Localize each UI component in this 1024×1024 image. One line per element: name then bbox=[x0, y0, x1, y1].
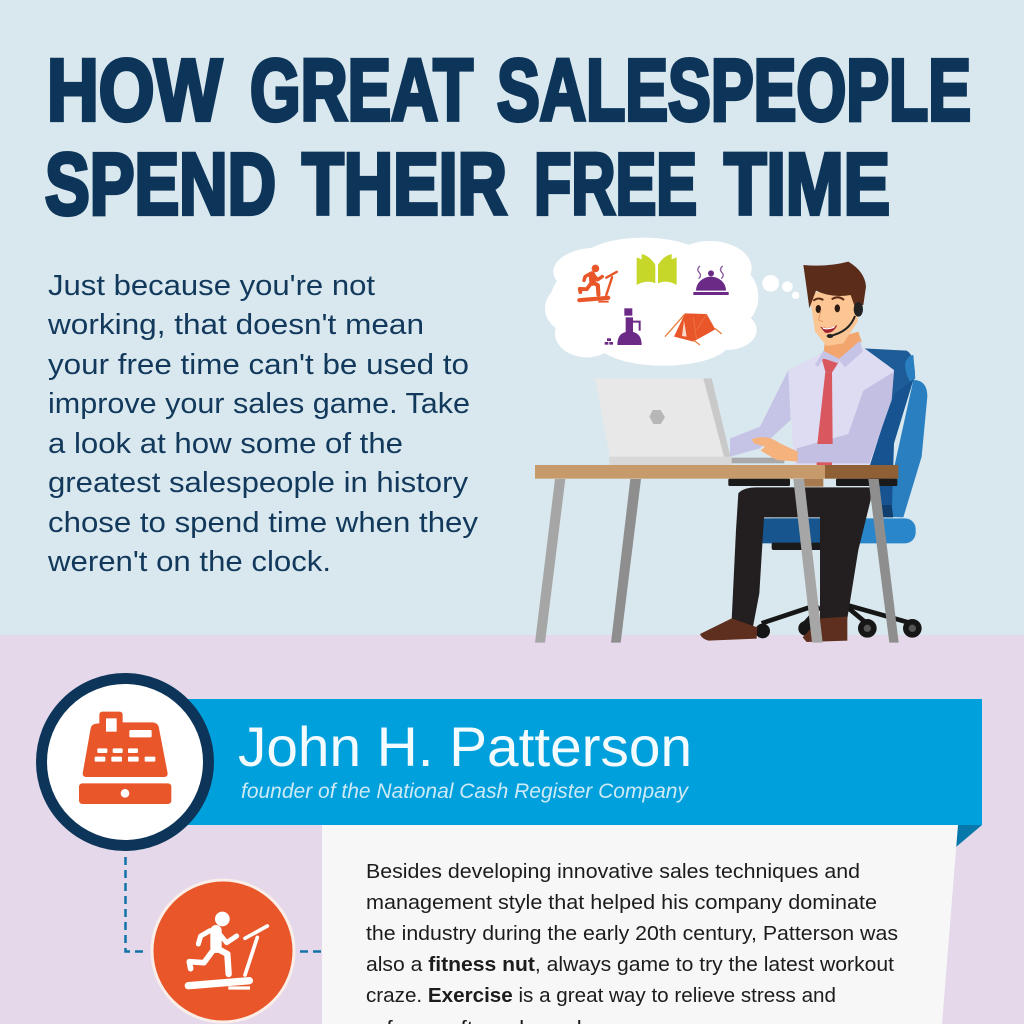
panel: biography text: the industry during the early 20th century, Patterson was bbox=[366, 923, 898, 945]
intro text: working, that doesn't mean bbox=[47, 309, 424, 341]
icon: tent bbox=[665, 313, 722, 345]
illustration: salesperson at desk bbox=[535, 238, 927, 643]
intro text: improve your sales game. Take bbox=[48, 388, 470, 420]
man: trousers and shoes bbox=[700, 487, 871, 642]
intro text: chose to spend time when they bbox=[48, 507, 479, 539]
intro text: Just because you're not bbox=[48, 270, 375, 302]
title: HOW bbox=[47, 42, 223, 139]
dashed connector bbox=[126, 857, 322, 952]
panel: biography text: also a fitness nut , always game to try the latest workout bbox=[366, 954, 894, 976]
panel: biography text: management style that helped his company dominate bbox=[366, 892, 877, 914]
man: head bbox=[803, 262, 866, 367]
icon: treadmill badge bbox=[152, 880, 294, 1022]
panel: biography text: Besides developing innovative sales techniques and bbox=[366, 861, 860, 883]
laptop bbox=[595, 378, 784, 465]
title bbox=[45, 42, 971, 233]
banner fold bbox=[956, 825, 982, 847]
intro text: greatest salespeople in history bbox=[48, 467, 469, 499]
title: GREAT bbox=[250, 42, 473, 139]
role subtitle: founder of the National Cash Register Company bbox=[241, 780, 689, 803]
title: TIME bbox=[724, 136, 890, 233]
man: shirt bbox=[730, 345, 894, 465]
panel: biography text bbox=[322, 825, 958, 1024]
man: hand bbox=[752, 437, 798, 462]
title: THEIR bbox=[302, 136, 507, 233]
name: John H. Patterson bbox=[238, 715, 692, 778]
icon: coffee grinder bbox=[605, 308, 642, 345]
title: FREE bbox=[534, 136, 697, 233]
icon: open book bbox=[637, 254, 677, 285]
intro text bbox=[47, 270, 479, 578]
intro text: your free time can't be used to bbox=[48, 349, 469, 381]
intro text: weren't on the clock. bbox=[47, 546, 331, 578]
man: tie bbox=[817, 358, 839, 465]
thought cloud bbox=[545, 238, 799, 366]
desk bbox=[535, 465, 899, 643]
chair bbox=[755, 348, 927, 638]
title: SPEND bbox=[45, 136, 276, 233]
banner: John H. Patterson bbox=[180, 699, 982, 847]
icon: cloche bbox=[693, 266, 729, 295]
icon: cash register badge bbox=[42, 678, 208, 846]
icon: small treadmill bbox=[579, 265, 617, 302]
panel: biography text: craze. Exercise is a great way to relieve stress and bbox=[366, 985, 836, 1007]
intro text: a look at how some of the bbox=[48, 428, 403, 460]
